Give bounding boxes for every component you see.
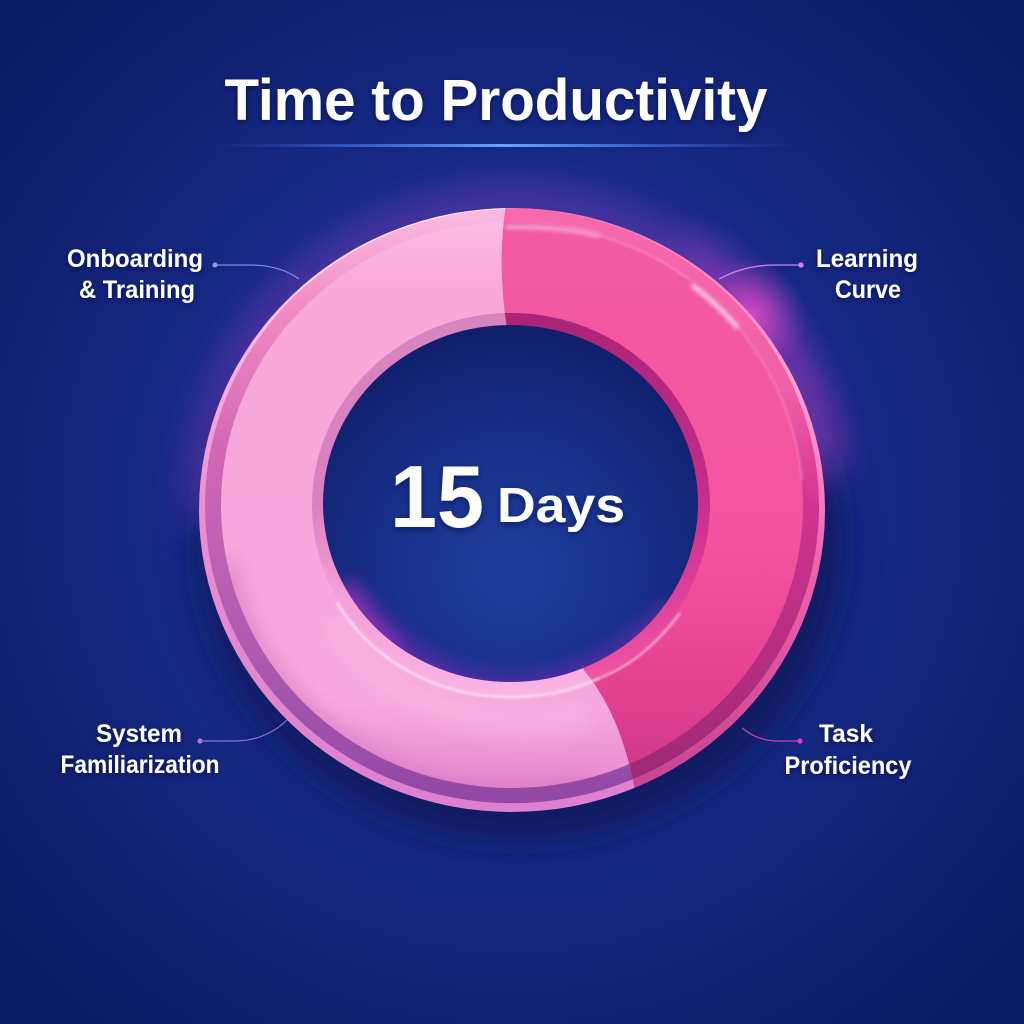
label: learning curve: Curve [835, 276, 901, 304]
segment: learning curve and task proficiency (hot pink) [502, 208, 825, 788]
title: Time to Productivity [224, 68, 768, 133]
center value: 15 [390, 447, 484, 546]
label: task proficiency: Proficiency [784, 752, 912, 780]
title divider [215, 144, 795, 147]
label: learning curve: Learning [816, 245, 918, 273]
label: system familiarization [60, 720, 287, 779]
label: task proficiency: Task [819, 720, 873, 748]
segment: onboarding and system familiarization (light pink) [199, 208, 635, 812]
donut chart [198, 205, 842, 841]
label: onboarding and training [67, 245, 299, 304]
label: onboarding and training: Onboarding [67, 245, 203, 273]
label: task proficiency [742, 720, 912, 780]
label: system familiarization: System [96, 720, 182, 748]
center value: Days [497, 479, 625, 533]
label: onboarding and training: & Training [79, 276, 195, 304]
label: learning curve [719, 245, 918, 304]
ring shadow and glow [198, 205, 842, 841]
center hole [323, 325, 698, 692]
glossy highlights [337, 227, 802, 697]
label: system familiarization: Familiarization [60, 751, 220, 779]
